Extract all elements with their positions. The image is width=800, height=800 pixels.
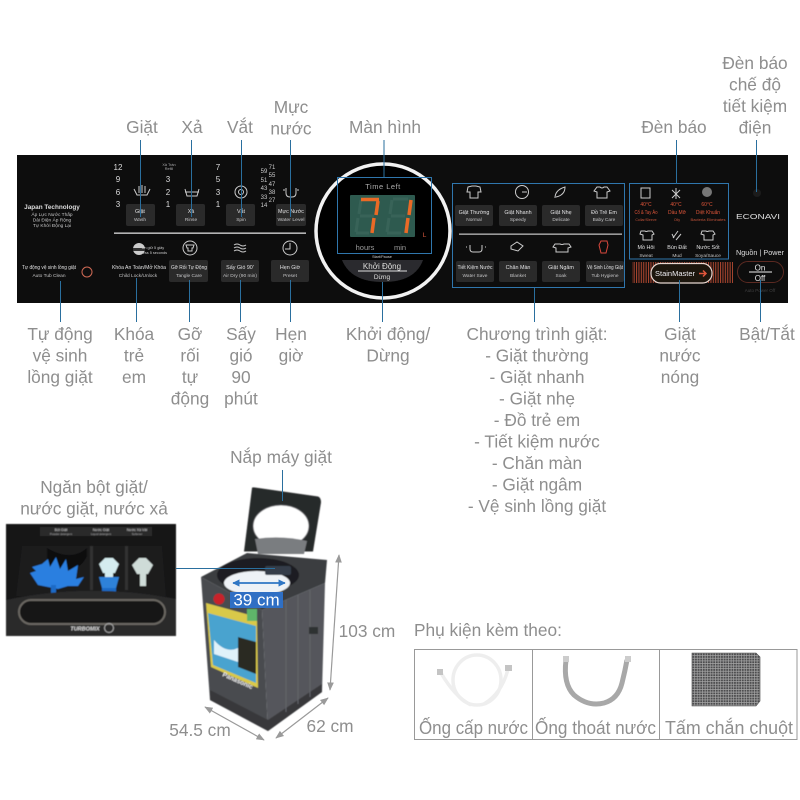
dimension: width: 54.5 cm [169,720,231,740]
display dial: L [423,232,427,239]
wash programs: Blanket [510,273,527,279]
wash, rinse, spin, water level selectors: 7 [216,163,221,172]
wash, rinse, spin, water level selectors: 2 [166,188,171,197]
photo: detergent drawer: Softener [132,532,142,536]
preset: Preset [283,273,298,279]
power button: On [755,264,765,272]
display dial: hours [356,243,375,252]
leader lines [60,140,760,322]
accessory: rodent mesh: Tấm chắn chuột [665,717,793,738]
wash, rinse, spin, water level selectors: 3 [116,200,121,209]
blue boxes [338,178,728,288]
display dial: Time Left [365,182,401,191]
power button: Nguồn | Power [736,248,784,257]
wash, rinse, spin, water level selectors: 47 [269,182,276,188]
stainmaster button [632,262,733,283]
wash programs: Tub Hygiene [591,273,619,279]
dimension: height: 103 cm [339,621,395,641]
tangle care: Gỡ Rối Tự Động [171,265,207,271]
wash programs: Normal [466,217,482,223]
child lock: Ấn giữ 5 giây [142,246,164,250]
photo: detergent drawer: Nước Giặt [93,528,109,532]
label: wash program list: - Giặt ngâm [492,474,582,494]
brand text: Japan Technology [24,204,80,229]
wash, rinse, spin, water level selectors: 3 [216,188,221,197]
label: wash program list: - Giặt thường [485,346,589,366]
label: Màn hình: Màn hình [349,117,421,137]
econavi: ECONAVI [736,212,780,221]
stain indicator lights: Collar/Sleeve [635,218,657,222]
label: Mực nước: nước [270,118,312,138]
label: Bật/Tắt: Bật/Tắt [739,324,795,344]
wash, rinse, spin, water level selectors: Spin [236,217,246,223]
photo: detergent drawer: Powder detergent [50,532,72,536]
wash, rinse, spin, water level selectors: 9 [116,175,121,184]
photo: detergent drawer: Nước Xả Vải [127,528,147,532]
stain indicator lights: 40°C [670,202,682,208]
wash, rinse, spin, water level selectors: 5 [216,175,221,184]
start/pause button: Start/Pause [372,255,392,259]
wash, rinse, spin, water level selectors: 12 [114,163,123,172]
label: Hẹn giờ: Hẹn [275,324,307,344]
diameter leader lines [176,470,282,568]
label: Mực nước: Mực [274,97,309,117]
wash programs: Speedy [510,217,527,223]
child lock: Press 5 seconds [139,251,167,255]
machine lid [244,487,321,554]
brand text: Japan Technology: Tự Khởi Động Lại [33,222,71,229]
wash, rinse, spin, water level selectors: Vắt [237,208,246,215]
preset [271,241,309,282]
stain indicator lights: Nước Sốt [696,245,720,251]
power button: Off [755,274,766,283]
label: Sấy gió 90 phút: gió [229,346,253,366]
photo: detergent drawer: Liquid detergent [91,532,111,536]
dimension: width [169,707,264,740]
child lock: Child Lock/Unlock [119,273,158,279]
bottom labels [27,324,795,516]
stain indicator lights: Sweat [639,253,653,259]
label: Sấy gió 90 phút: 90 [231,367,251,387]
wash, rinse, spin, water level selectors: 1 [166,200,171,209]
label: Gỡ rối tự động: động [171,388,209,408]
label: Đèn báo chế độ tiết kiệm điện: điện [739,118,771,138]
wash, rinse, spin, water level selectors: 6 [116,188,121,197]
wash programs: Soak [556,273,567,279]
stain indicator lights: Bacteria Eliminates [690,218,726,222]
stain indicator lights: Diệt Khuẩn [696,209,720,216]
air dry: Air Dry (90 min) [223,273,257,279]
label: Tự động vệ sinh lồng giặt: vệ sinh [33,346,87,366]
child lock [112,243,167,279]
child lock: Khóa An Toàn/Mở Khóa [112,264,166,271]
stain indicator lights [634,187,726,259]
accessory: water supply hose: Ống cấp nước [419,717,528,738]
top labels [126,53,788,138]
tub opening [217,558,299,595]
wash programs: Vệ Sinh Lồng Giặt [587,265,623,271]
start/pause button [342,255,423,282]
stain indicator lights: 60°C [701,202,713,208]
diameter label: 39 cm: 39 cm [233,590,280,610]
label: Giặt nước nóng: nóng [661,367,699,387]
label: wash program list: Chương trình giặt: [466,324,608,344]
stain indicator lights: Soya/Sauce [695,253,721,259]
display dial: min [394,243,406,252]
wash programs: Giặt Nhẹ [550,210,572,216]
label: Đèn báo: Đèn báo [641,117,707,137]
wash programs: Giặt Ngâm [548,265,574,271]
accessory: drain hose [535,656,656,738]
stain indicator lights: 40°C [640,202,652,208]
wash, rinse, spin, water level selectors: 71 [269,165,276,171]
photo: detergent drawer: TURBOMIX [70,626,100,632]
wash, rinse, spin, water level selectors: 1 [216,200,221,209]
label: Gỡ rối tự động: rối [180,346,200,366]
label: Khóa trẻ em: trẻ [124,346,144,366]
label: wash program list: - Giặt nhanh [489,367,585,387]
promotional sticker: Panasonic [221,671,254,691]
tangle care: Tangle Care [176,273,202,279]
wash, rinse, spin, water level selectors: Water Level [278,217,304,223]
wash programs: Baby Care [593,217,616,223]
wash, rinse, spin, water level selectors: 43 [261,186,268,192]
stain indicator lights: Bùn Đất [667,245,687,251]
wash, rinse, spin, water level selectors: Xả [188,209,194,215]
dimension: depth: 62 cm [306,716,354,736]
brand text: Japan Technology: Japan Technology [24,204,80,211]
auto tub clean: Auto Tub Clean [32,273,66,279]
dimension: depth [276,698,354,738]
label: Khởi động/Dừng: Dừng [366,346,410,366]
label: Gỡ rối tự động: tự [182,367,199,387]
brand text: Japan Technology: Áp Lực Nước Thấp [31,211,73,218]
label: Đèn báo chế độ tiết kiệm điện: tiết kiệm [723,96,787,116]
photo: detergent drawer [6,524,176,636]
wash, rinse, spin, water level selectors: 27 [269,198,276,204]
wash, rinse, spin, water level selectors: 55 [269,173,276,179]
stain indicator lights: Oily [674,218,680,222]
label: Gỡ rối tự động: Gỡ [178,324,202,344]
stain indicator lights: Dầu Mỡ [668,210,687,216]
label: Xả: Xả [181,117,203,137]
wash programs: Giặt Nhanh [504,210,532,216]
wash programs: Water Save [463,273,488,279]
wash, rinse, spin, water level selectors: Mực Nước [278,209,304,215]
label: Giặt: Giặt [126,117,158,137]
diameter arrow [233,582,285,584]
dimension: height [330,555,395,690]
label: Sấy gió 90 phút: Sấy [226,324,256,344]
wash, rinse, spin, water level selectors: Refill [165,167,173,171]
label: Ngăn bột giặt: nước giặt, nước xả [20,498,168,518]
wash programs: Đồ Trẻ Em [591,210,617,216]
accessory: water supply hose [419,655,528,738]
label: Vắt: Vắt [227,117,253,137]
promotional sticker [206,594,258,691]
label: Khóa trẻ em: Khóa [114,324,155,344]
preset: Hẹn Giờ [280,265,301,271]
wash, rinse, spin, water level selectors: 51 [261,178,268,184]
label: Đèn báo chế độ tiết kiệm điện: chế độ [729,74,781,94]
display dial [316,164,450,298]
machine body [201,553,327,731]
label: wash program list: - Vệ sinh lồng giặt [468,496,606,516]
tangle care [169,241,208,282]
auto tub clean: Tự động vệ sinh lồng giặt [22,265,76,271]
control panel [17,155,788,303]
wash programs: Chăn Màn [506,265,530,271]
label: Nắp máy giặt: Nắp máy giặt [230,447,332,467]
seven-segment display [350,195,415,237]
washing machine [201,487,327,731]
accessories heading: Phụ kiện kèm theo: [414,620,562,640]
air dry: Sấy Gió 90' [226,265,254,271]
label: Sấy gió 90 phút: phút [224,388,258,408]
wash, rinse, spin, water level selectors: Giặt [135,209,145,215]
wash, rinse, spin, water level selectors: 3 [166,175,171,184]
accessories table [414,650,797,740]
air dry [221,244,259,282]
stainmaster button: StainMaster [655,269,696,278]
label: Giặt nước nóng: Giặt [664,324,696,344]
label: wash program list: - Giặt nhẹ [499,388,575,408]
power button: Auto Power Off [745,288,776,293]
power button [736,248,784,293]
label: Giặt nước nóng: nước [659,346,701,366]
wash, rinse, spin, water level selectors: 59 [261,169,268,175]
start/pause button: Dừng [374,274,391,281]
stain indicator lights: Cổ & Tay Áo [634,209,658,216]
brand text: Japan Technology: Dải Điện Áp Rộng [33,216,72,224]
label: Ngăn bột giặt: Ngăn bột giặt/ [40,477,148,497]
label: wash program list: - Tiết kiệm nước [474,432,600,452]
start/pause button: Khởi Động [363,262,401,271]
wash, rinse, spin, water level selectors [114,163,306,234]
wash programs [455,186,624,282]
stain indicator lights: Mồ Hôi [637,245,655,251]
wash, rinse, spin, water level selectors: Xả Tràn [162,163,176,167]
stain indicator lights: Mud [672,253,682,259]
photo: detergent drawer: Bột Giặt [55,528,67,532]
wash, rinse, spin, water level selectors: 38 [269,190,276,196]
label: Khóa trẻ em: em [122,367,146,387]
accessory: rodent mesh [665,653,793,738]
wash programs: Tiết Kiệm Nước [458,265,493,271]
label: Tự động vệ sinh lồng giặt: lồng giặt [27,367,93,387]
wash programs: Delicate [552,217,570,223]
wash programs: Giặt Thường [459,210,489,216]
econavi [736,189,780,221]
label: Đèn báo chế độ tiết kiệm điện: Đèn báo [722,53,788,73]
wash, rinse, spin, water level selectors: Wash [134,217,146,223]
label: Hẹn giờ: giờ [279,346,303,366]
auto tub clean [22,265,92,279]
accessory: drain hose: Ống thoát nước [535,717,656,738]
wash, rinse, spin, water level selectors: 33 [261,195,268,201]
label: wash program list: - Chăn màn [492,453,582,473]
label: Khởi động/Dừng: Khởi động/ [346,324,430,344]
wash, rinse, spin, water level selectors: 14 [261,203,268,209]
label: wash program list: - Đồ trẻ em [494,410,580,430]
wash, rinse, spin, water level selectors: Rinse [185,217,197,223]
label: Tự động vệ sinh lồng giặt: Tự động [27,324,93,344]
